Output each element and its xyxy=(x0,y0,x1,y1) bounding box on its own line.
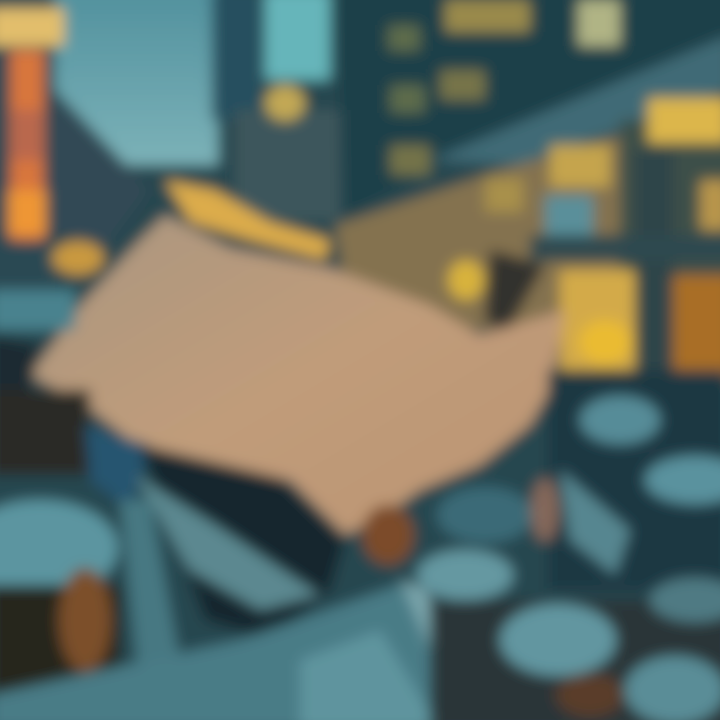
icon: orange tower xyxy=(0,8,64,240)
building lights xyxy=(52,0,720,380)
marker: brown southern tip of the map xyxy=(362,505,414,565)
map: tan silhouette of the USA xyxy=(30,180,565,565)
highlight: golden top edge of the map xyxy=(165,180,330,260)
foreground: dark tables and teal stools xyxy=(0,290,720,720)
background: city skyline xyxy=(0,0,720,390)
